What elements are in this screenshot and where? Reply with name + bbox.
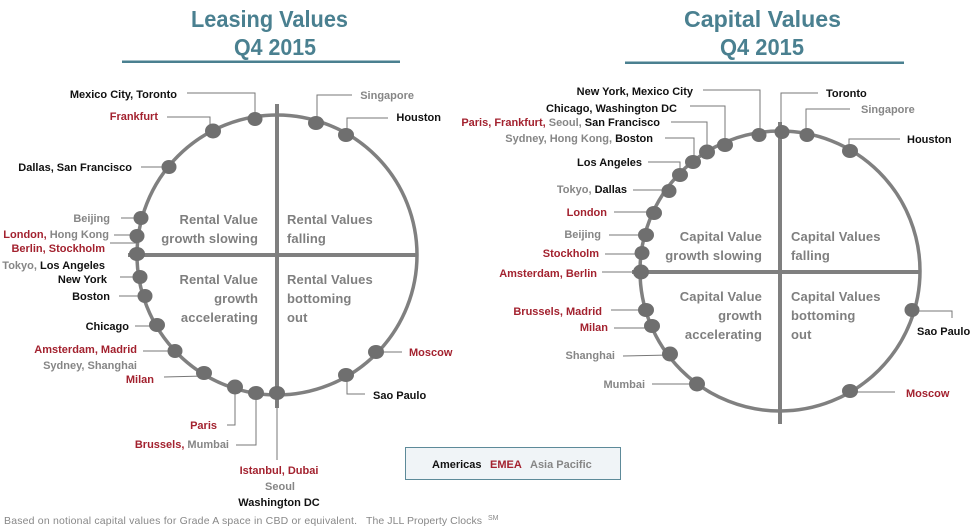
city labels: leasing clock: Milan — [126, 374, 154, 386]
quadrant labels: leasing clock: Rental Value — [179, 272, 258, 287]
city labels: capital clock: Amsterdam, Berlin — [499, 268, 597, 280]
city labels: capital clock: Brussels, Madrid — [513, 306, 602, 318]
city labels: leasing clock: Dallas, San Francisco — [18, 162, 132, 174]
quadrant labels: leasing clock — [161, 212, 373, 325]
quadrant labels: capital clock: growth — [718, 308, 762, 323]
city labels: capital clock: Beijing — [564, 229, 601, 241]
city labels: capital clock: Sydney, Hong Kong, Boston — [505, 133, 653, 145]
city labels: leasing clock: Brussels, Mumbai — [135, 439, 229, 451]
city labels: capital clock: Milan — [580, 322, 608, 334]
city labels: capital clock: Houston — [907, 134, 952, 146]
quadrant labels: leasing clock: Rental Value — [179, 212, 258, 227]
quadrant labels: leasing clock: Rental Values — [287, 272, 373, 287]
legend: Asia Pacific — [530, 459, 592, 471]
city labels: capital clock: Singapore — [861, 104, 915, 116]
city labels: capital clock: Shanghai — [565, 350, 615, 362]
quadrant labels: leasing clock: out — [287, 310, 308, 325]
quadrant labels: leasing clock: growth — [214, 291, 258, 306]
city labels: capital clock: Mumbai — [603, 379, 645, 391]
city labels: capital clock — [461, 86, 970, 400]
legend — [406, 448, 620, 480]
city labels: leasing clock: Sydney, Shanghai — [43, 360, 137, 372]
city labels: leasing clock: Istanbul, Dubai — [240, 465, 318, 477]
city dots: capital clock — [633, 125, 920, 398]
city labels: leasing clock: Moscow — [409, 347, 453, 359]
city labels: capital clock: Tokyo, Dallas — [557, 184, 627, 196]
city labels: leasing clock: Houston — [396, 112, 441, 124]
city labels: leasing clock: New York — [58, 274, 108, 286]
footnote: The JLL Property Clocks — [366, 515, 482, 527]
quadrant labels: leasing clock: falling — [287, 231, 326, 246]
city dots: leasing clock — [129, 112, 384, 400]
city labels: leasing clock: Seoul — [265, 481, 295, 493]
city labels: capital clock: Los Angeles — [577, 157, 642, 169]
quadrant labels: leasing clock: bottoming — [287, 291, 351, 306]
footnote: Based on notional capital values for Grade A space in CBD or equivalent. — [4, 515, 357, 527]
quadrant labels: leasing clock: Rental Values — [287, 212, 373, 227]
legend: EMEA — [490, 459, 522, 471]
quadrant labels: capital clock — [665, 229, 881, 342]
quadrant labels: capital clock: bottoming — [791, 308, 855, 323]
chart: Capital Values property clock — [461, 86, 970, 424]
leader lines: capital clock — [602, 90, 952, 392]
city labels: leasing clock: Sao Paulo — [373, 390, 426, 402]
quadrant labels: capital clock: falling — [791, 248, 830, 263]
quadrant labels: capital clock: out — [791, 327, 812, 342]
city labels: leasing clock: Mexico City, Toronto — [70, 89, 177, 101]
city labels: capital clock: Moscow — [906, 388, 950, 400]
city labels: capital clock: Chicago, Washington DC — [546, 103, 677, 115]
city labels: leasing clock: Chicago — [86, 321, 129, 333]
city labels: capital clock: London — [567, 207, 607, 219]
city labels: capital clock: Sao Paulo — [917, 326, 970, 338]
city labels: leasing clock: Berlin, Stockholm — [11, 243, 105, 255]
legend: Americas — [432, 459, 482, 471]
title: Capital Values — [625, 6, 904, 64]
quadrant labels: capital clock: Capital Value — [680, 229, 762, 244]
quadrant labels: capital clock: growth slowing — [665, 248, 762, 263]
city labels: leasing clock: Singapore — [360, 90, 414, 102]
title: Leasing Values — [122, 6, 400, 63]
city labels: leasing clock: Washington DC — [238, 497, 320, 509]
quadrant labels: capital clock: Capital Values — [791, 289, 881, 304]
city labels: capital clock: Stockholm — [543, 248, 599, 260]
city labels: capital clock: Paris, Frankfurt, Seoul, San Francisco — [461, 117, 660, 129]
city labels: leasing clock: Beijing — [73, 213, 110, 225]
title: Leasing Values: Q4 2015 — [234, 34, 316, 60]
city labels: leasing clock: Boston — [72, 291, 110, 303]
city labels: leasing clock: Paris — [190, 420, 217, 432]
title: Leasing Values: Leasing Values — [191, 6, 348, 32]
quadrant labels: leasing clock: accelerating — [181, 310, 258, 325]
title: Capital Values: Q4 2015 — [720, 34, 804, 60]
quadrant labels: capital clock: Capital Value — [680, 289, 762, 304]
quadrant labels: capital clock: Capital Values — [791, 229, 881, 244]
quadrant labels: capital clock: accelerating — [685, 327, 762, 342]
title: Capital Values: Capital Values — [684, 6, 841, 32]
city labels: capital clock: Toronto — [826, 88, 867, 100]
city labels: leasing clock: Tokyo, Los Angeles — [2, 260, 105, 272]
chart: Leasing Values property clock — [2, 89, 453, 509]
city labels: leasing clock: Frankfurt — [110, 111, 158, 123]
footnote: SM — [488, 515, 499, 522]
city labels: leasing clock: Amsterdam, Madrid — [34, 344, 137, 356]
city labels: capital clock: New York, Mexico City — [577, 86, 694, 98]
leader lines: leasing clock — [110, 93, 402, 460]
city labels: leasing clock — [2, 89, 453, 509]
quadrant labels: leasing clock: growth slowing — [161, 231, 258, 246]
city labels: leasing clock: London, Hong Kong — [3, 229, 109, 241]
